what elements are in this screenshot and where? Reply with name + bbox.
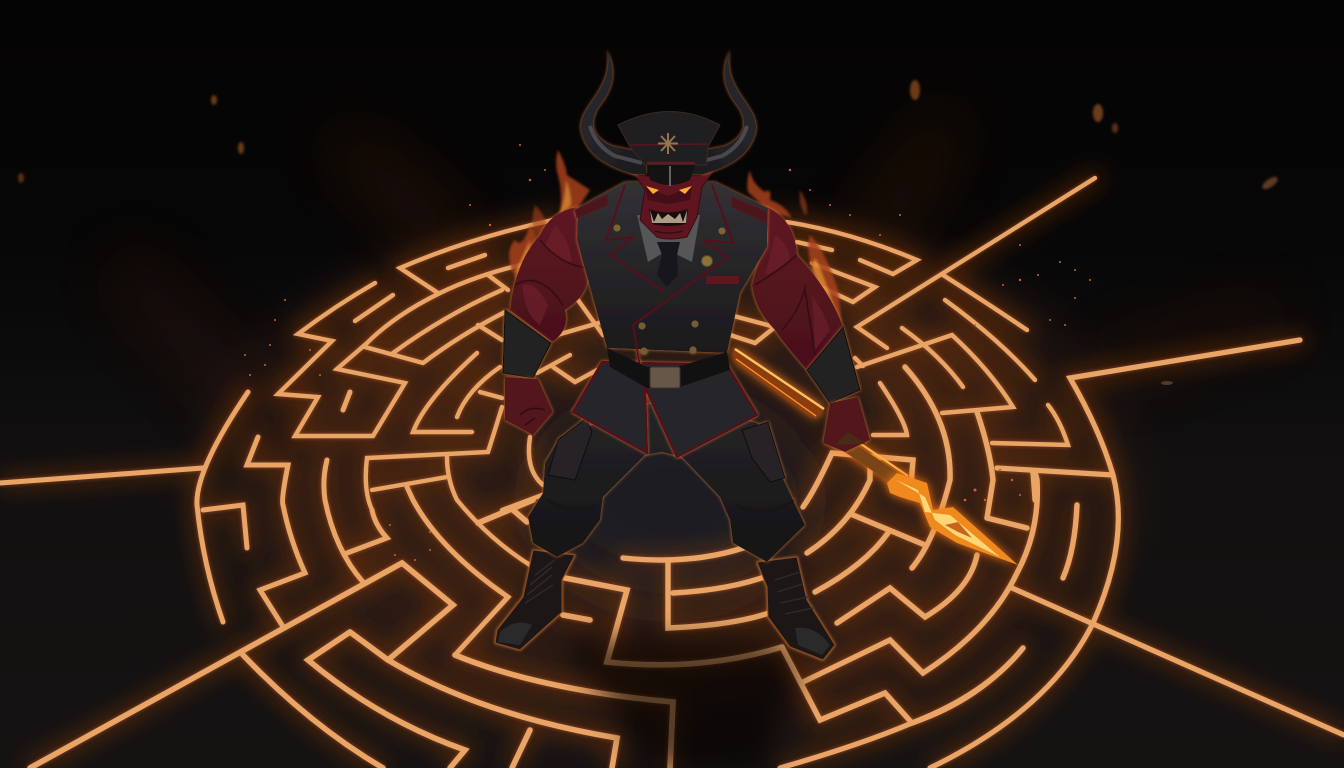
fanged mouth — [649, 209, 688, 226]
maze: lower left walls and ray — [30, 500, 782, 768]
collared shirt — [637, 215, 700, 262]
embers and drifting sparks — [18, 80, 1280, 561]
right fist — [823, 397, 870, 452]
demon figure — [495, 50, 870, 660]
maze: centre rings — [623, 367, 1077, 723]
breast pocket bar — [706, 276, 739, 284]
thigh pocket left — [548, 418, 592, 480]
buttons — [638, 322, 646, 330]
horn left — [581, 50, 646, 174]
right boot — [757, 557, 835, 660]
maze: upper left walls — [278, 220, 603, 565]
lapels — [606, 185, 733, 367]
cap badge — [658, 133, 678, 154]
horn right — [691, 50, 756, 174]
maze: right side outer walls and rays — [780, 340, 1344, 768]
flames behind left shoulder — [509, 150, 590, 285]
epaulettes — [575, 195, 767, 223]
labyrinth — [0, 178, 1344, 768]
left bracer — [503, 310, 551, 378]
necktie — [657, 242, 680, 287]
officer cap — [618, 112, 720, 186]
glowing eyes — [646, 186, 692, 194]
left boot — [495, 550, 575, 650]
maze: left side walls and ray — [0, 392, 508, 655]
maze: upper right walls and ray — [730, 178, 1095, 445]
head and face — [622, 168, 716, 239]
flames behind right shoulder — [747, 170, 842, 325]
cast shadow under the figure — [560, 640, 800, 768]
right upper arm — [752, 207, 843, 370]
belt and buckle — [607, 348, 730, 388]
right bracer — [807, 327, 860, 403]
left upper arm — [510, 207, 588, 342]
trousers — [528, 400, 805, 562]
double-breasted jacket — [575, 182, 768, 367]
fiery spearhead — [887, 473, 1018, 565]
thigh pocket right — [742, 422, 785, 482]
left fist — [505, 377, 553, 435]
gold insignia — [614, 224, 620, 232]
spear shaft behind the right hand — [733, 347, 908, 488]
vest skirt — [573, 362, 757, 457]
